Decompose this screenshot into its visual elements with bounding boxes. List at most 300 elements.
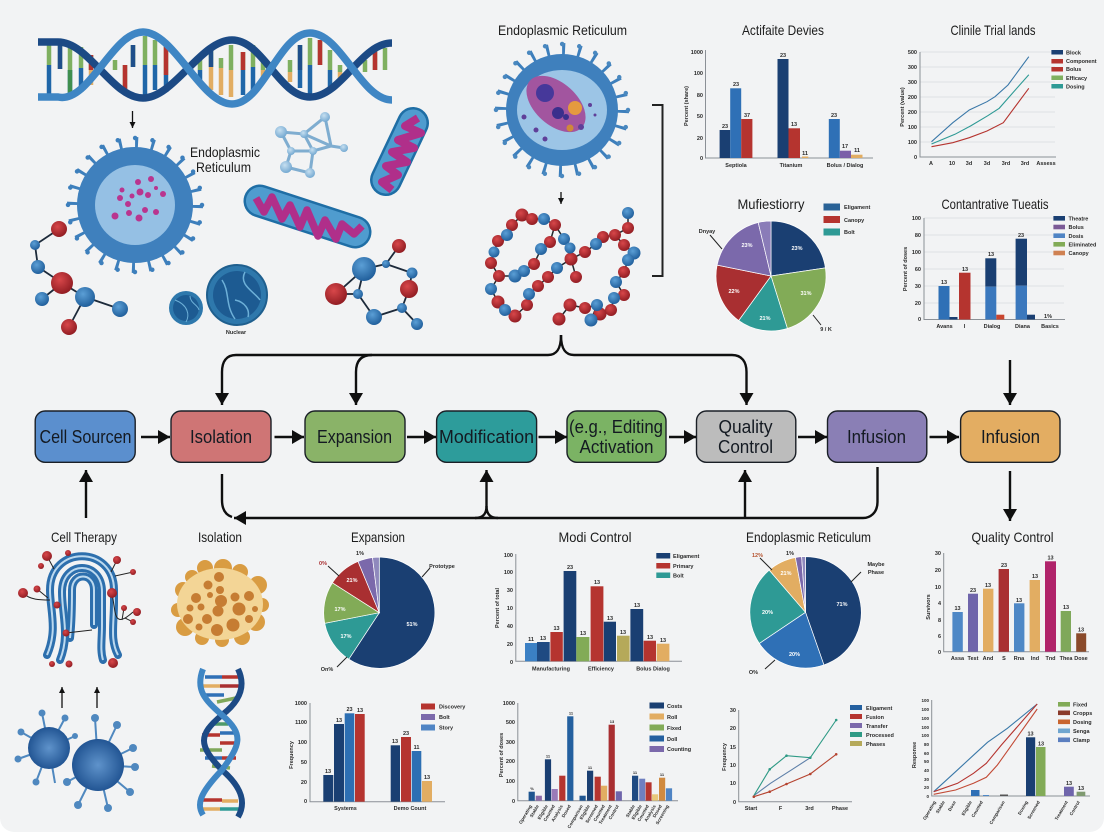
chart: mixed line and bars lower right: Dose	[947, 800, 957, 812]
chart: mixed line and bars lower right: 100	[921, 707, 929, 712]
chart: Modi Control grouped bars: 13	[580, 631, 586, 637]
chart: Actifaite Devies bar chart	[684, 22, 873, 169]
chart: Quality Control bars: 30	[935, 551, 941, 557]
chart: Contantrative Tueatis stacked bars: Diana	[1015, 324, 1031, 330]
chart: Actifaite Devies bar chart: 37	[744, 113, 750, 119]
step: Infusion: Infusion	[847, 427, 906, 447]
chart: Endoplasmic Reticulum pie: 1%	[786, 551, 794, 557]
illustration: vertical DNA	[200, 669, 242, 817]
chart: Quality Control bars: 23	[970, 588, 976, 594]
chart: multi-group bars lower middle: Screened	[584, 804, 599, 824]
arrow: up to Cell Sourcen	[85, 470, 87, 518]
chart: Mufiestiorry pie chart: 22%	[728, 289, 740, 295]
chart: Actifaite Devies bar chart: Bolus / Dialog	[827, 163, 863, 169]
chart: mixed line and bars lower right: Counted	[970, 800, 984, 818]
step: Expansion	[305, 411, 405, 462]
chart: Modi Control grouped bars	[495, 553, 699, 672]
chart: grouped bars lower left: 13	[336, 718, 342, 724]
chart: multi-group bars lower middle: Treatment	[598, 804, 613, 825]
chart: mixed line and bars lower right: Comparison	[988, 800, 1006, 825]
chart: grouped bars lower left: 13	[325, 769, 331, 775]
chart: mixed line and bars lower right: 100	[921, 716, 929, 721]
connector: top brace with arrows to Isolation, Expansion, Quality Control	[222, 335, 746, 405]
chart: Contantrative Tueatis stacked bars	[903, 196, 1096, 330]
chart: grouped bars lower left: 13	[424, 775, 430, 781]
chart: grouped bars lower left: Discovery	[439, 704, 466, 710]
chart: multi-group bars lower middle: Counted	[636, 804, 650, 822]
chart: Mufiestiorry pie chart: 23%	[791, 246, 803, 252]
chart: Modi Control grouped bars: 13	[620, 630, 626, 636]
chart: two-series line chart: 30	[730, 708, 736, 714]
title: Expansion: Expansion	[351, 529, 405, 545]
chart: mixed line and bars lower right: 13	[1038, 742, 1044, 748]
chart: multi-group bars lower middle: Control	[608, 804, 620, 820]
chart: multi-group bars lower middle: Analysis	[643, 804, 657, 823]
chart: Modi Control grouped bars: Eligament	[673, 554, 699, 560]
chart: Actifaite Devies bar chart: 23	[722, 124, 728, 130]
chart: Quality Control bars: 6	[938, 634, 941, 640]
chart: Clinile Trial lands line chart: 3d	[984, 161, 990, 167]
step: Modification: Modification	[439, 427, 534, 447]
chart: multi-group bars lower middle: Counting	[667, 747, 691, 753]
chart: multi-group bars lower middle: Counted	[542, 804, 556, 822]
chart: Modi Control grouped bars: Manufacturing	[532, 666, 570, 672]
chart: multi-group bars lower middle: Dosed	[561, 804, 572, 818]
chart: Clinile Trial lands line chart: Efficacy	[1066, 76, 1088, 82]
chart: Clinile Trial lands line chart: Assess	[1036, 161, 1056, 167]
chart: multi-group bars lower middle: %	[530, 786, 534, 791]
chart: Actifaite Devies bar chart: 50	[697, 114, 703, 120]
chart: Clinile Trial lands line chart	[900, 22, 1097, 167]
chart: Mufiestiorry pie chart: 9 / K	[820, 327, 832, 333]
chart: Quality Control bars	[926, 551, 1089, 662]
label: Endoplasmic Reticulum: Endoplasmic	[190, 144, 260, 160]
arrow: down to right Infusion	[1009, 360, 1011, 405]
chart: Modi Control grouped bars: 13	[647, 635, 653, 641]
chart: Clinile Trial lands line chart: Component	[1066, 59, 1097, 65]
chart: multi-group bars lower middle: Stable	[529, 804, 540, 818]
chart: Modi Control grouped bars: 13	[553, 626, 560, 632]
chart: Actifaite Devies bar chart: 11	[854, 148, 860, 154]
chart: two-series line chart: Phase	[832, 806, 848, 812]
chart: multi-group bars lower middle: 11	[569, 710, 574, 716]
chart: Actifaite Devies bar chart: 1000	[691, 50, 703, 56]
chart: Actifaite Devies bar chart: 23	[780, 53, 786, 59]
chart: multi-group bars lower middle: Eligible	[537, 804, 549, 820]
illustration: round organelles: Nuclear	[226, 330, 247, 336]
title: Quality Control: Quality Control	[972, 529, 1054, 545]
chart: multi-group bars lower middle: Costs	[667, 704, 682, 710]
chart: Contantrative Tueatis stacked bars: 100	[912, 250, 921, 256]
illustration: round organelles	[169, 265, 267, 336]
chart: Contantrative Tueatis stacked bars: Contantrative Tueatis	[942, 196, 1048, 212]
chart: Clinile Trial lands line chart: Percent (value)	[900, 87, 906, 127]
chart: multi-group bars lower middle: 0	[512, 799, 515, 805]
bracket: right of bead chain	[652, 105, 662, 276]
chart: Clinile Trial lands line chart: 300	[908, 65, 917, 71]
chart: multi-group bars lower middle: 11	[660, 772, 665, 777]
chart: Actifaite Devies bar chart: Actifaite Devies	[742, 22, 824, 38]
chart: Contantrative Tueatis stacked bars: Avans	[936, 324, 953, 330]
chart: two-series line chart: 3rd	[805, 806, 814, 812]
chart: Expansion pie: 51%	[406, 622, 418, 628]
chart: Quality Control bars: 13	[954, 606, 961, 612]
chart: Expansion pie: 17%	[340, 634, 352, 640]
illustration: DNA double helix	[38, 32, 392, 104]
chart: Clinile Trial lands line chart: Dosing	[1066, 84, 1085, 90]
chart: Modi Control grouped bars: Primary	[673, 564, 694, 570]
chart: multi-group bars lower middle: Analysis	[550, 804, 564, 823]
chart: Modi Control grouped bars: Percent of total	[495, 588, 501, 628]
chart: Modi Control grouped bars: Efficiency	[588, 666, 615, 672]
chart: multi-group bars lower middle: 200	[506, 759, 515, 765]
chart: Expansion pie: Prototype	[429, 564, 455, 570]
connector: return loop under flow	[222, 467, 878, 518]
chart: Quality Control bars: 13	[1063, 605, 1069, 611]
chart: Quality Control bars: Thea	[1060, 656, 1073, 662]
step: Infusion final: Infusion	[981, 427, 1040, 447]
chart: Endoplasmic Reticulum pie: 20%	[762, 610, 773, 616]
title: Endoplasmic Reticulum top: Endoplasmic Reticulum	[498, 22, 627, 38]
chart: Contantrative Tueatis stacked bars: I	[964, 324, 966, 330]
step: Editing Activation: Activation	[580, 437, 654, 457]
illustration: mitochondrion upright	[382, 118, 421, 190]
chart: multi-group bars lower middle: Fixed	[667, 726, 681, 732]
chart: Clinile Trial lands line chart: A	[929, 161, 933, 167]
chart: mixed line and bars lower right: Screened	[1026, 800, 1041, 820]
chart: mixed line and bars lower right: 0	[926, 794, 929, 799]
title: Isolation: Isolation	[198, 529, 242, 545]
chart: Contantrative Tueatis stacked bars: 0	[918, 317, 921, 323]
chart: Quality Control bars: 10	[935, 585, 941, 591]
chart: Modi Control grouped bars: 40	[507, 624, 513, 630]
chart: Contantrative Tueatis stacked bars: Theatre	[1068, 216, 1088, 222]
chart: Quality Control bars: Survivors	[926, 594, 932, 620]
illustration: isolated cell cluster	[171, 559, 269, 647]
chart: grouped bars lower left: Demo Count	[394, 806, 427, 812]
chart: Contantrative Tueatis stacked bars: 1%	[1044, 314, 1052, 320]
chart: multi-group bars lower middle: 13	[610, 719, 615, 724]
step: Cell Sourcen: Cell Sourcen	[40, 427, 132, 447]
chart: mixed line and bars lower right: Stable	[935, 800, 946, 814]
chart: Quality Control bars: 13	[1078, 628, 1084, 634]
chart: grouped bars lower left: Systems	[334, 806, 357, 812]
chart: Modi Control grouped bars: 100	[504, 570, 513, 576]
chart: Contantrative Tueatis stacked bars: Eliminated	[1068, 242, 1096, 248]
chart: Clinile Trial lands line chart: 3rd	[1021, 161, 1029, 167]
chart: Modi Control grouped bars: 20	[507, 642, 513, 648]
chart: grouped bars lower left: Frequency	[289, 740, 295, 769]
arrows: spiky cells upward	[62, 687, 97, 708]
chart: Actifaite Devies bar chart: 80	[697, 93, 703, 99]
chart: grouped bars lower left: 23	[346, 707, 353, 713]
chart: Clinile Trial lands line chart: Clinile Trial lands	[950, 22, 1036, 38]
chart: Contantrative Tueatis stacked bars: 80	[915, 233, 921, 239]
label: Endoplasmic Reticulum: Reticulum	[196, 159, 251, 175]
chart: Quality Control bars: 8	[938, 618, 941, 624]
chart: Mufiestiorry pie chart: Eligament	[844, 205, 870, 211]
chart: multi-group bars lower middle: Dosed	[652, 804, 663, 818]
chart: mixed line and bars lower right: Eligible	[961, 800, 973, 816]
chart: Mufiestiorry pie chart: 23%	[741, 243, 753, 249]
chart: Modi Control grouped bars: 13	[594, 580, 600, 586]
chart: mixed line and bars lower right: 13	[1027, 732, 1034, 738]
chart: Clinile Trial lands line chart: 200	[908, 110, 917, 116]
process flow	[35, 411, 1060, 462]
chart: Expansion pie: 1%	[356, 551, 364, 557]
arrow: cell to bead chain	[560, 192, 562, 204]
step: Infusion	[828, 411, 927, 462]
chart: Clinile Trial lands line chart: 100	[908, 140, 917, 146]
chart: Actifaite Devies bar chart: 100	[694, 71, 703, 77]
chart: mixed line and bars lower right: 30	[924, 777, 929, 782]
chart: mixed line and bars lower right: 13	[1078, 786, 1084, 792]
chart: Quality Control bars: 13	[1047, 556, 1054, 562]
chart: Clinile Trial lands line chart: 0	[914, 155, 917, 161]
chart: mixed line and bars lower right: Fixed	[1073, 702, 1087, 708]
chart: grouped bars lower left: 1100	[295, 720, 307, 726]
chart: multi-group bars lower middle: 100	[506, 779, 515, 785]
chart: multi-group bars lower middle: Roll	[667, 715, 678, 721]
chart: Actifaite Devies bar chart: Septiola	[725, 163, 748, 169]
chart: Quality Control bars: Tnd	[1045, 656, 1056, 662]
chart: two-series line chart: Transfer	[866, 724, 889, 730]
chart: mixed line and bars lower right: 13	[1066, 781, 1072, 787]
chart: two-series line chart	[722, 705, 894, 812]
chart: two-series line chart: Start	[745, 806, 757, 812]
illustration: molecule right	[325, 239, 423, 330]
chart: Quality Control bars: 20	[935, 568, 941, 574]
chart: Modi Control grouped bars: Bolt	[673, 574, 684, 580]
chart: Mufiestiorry pie chart: Dnyay	[699, 229, 716, 235]
step: Editing Activation: (e.g., Editing	[569, 417, 663, 437]
chart: multi-group bars lower middle: 500	[506, 720, 515, 726]
chart: Endoplasmic Reticulum pie: Maybe	[867, 562, 885, 568]
step: Editing Activation	[567, 411, 666, 462]
chart: Expansion pie: 21%	[346, 578, 358, 584]
chart: multi-group bars lower middle: Eligible	[579, 804, 591, 820]
chart: two-series line chart: Frequency	[722, 742, 728, 771]
chart: two-series line chart: 0	[733, 800, 736, 806]
chart: multi-group bars lower middle: 11	[546, 754, 551, 758]
chart: two-series line chart: Eligament	[866, 706, 892, 712]
title: Modi Control: Modi Control	[558, 529, 632, 545]
arrows: between steps	[141, 436, 959, 438]
chart: mixed line and bars lower right: 100	[921, 733, 929, 738]
chart: mixed line and bars lower right: 60	[924, 751, 929, 756]
chart: Actifaite Devies bar chart: 23	[831, 113, 837, 119]
chart: grouped bars lower left: 100	[298, 740, 307, 746]
chart: Clinile Trial lands line chart: 200	[908, 95, 917, 101]
chart: Contantrative Tueatis stacked bars: 20	[915, 301, 921, 307]
chart: two-series line chart: 15	[730, 745, 736, 751]
chart: Contantrative Tueatis stacked bars: Basics	[1041, 324, 1059, 330]
chart: mixed line and bars lower right: Clamp	[1073, 738, 1090, 744]
chart: Modi Control grouped bars: 100	[504, 553, 513, 559]
step: Isolation	[171, 411, 271, 462]
chart: Actifaite Devies bar chart: 20	[697, 136, 703, 142]
chart: Expansion pie: 0%	[319, 561, 327, 567]
chart: Contantrative Tueatis stacked bars: 23	[1018, 233, 1024, 239]
illustration: blue cell with nucleus	[68, 138, 202, 272]
chart: mixed line and bars lower right: 100	[921, 725, 929, 730]
arrow: DNA to cell	[132, 111, 134, 128]
chart: Actifaite Devies bar chart: 17	[842, 144, 848, 150]
chart: Expansion pie: 17%	[334, 607, 346, 613]
chart: two-series line chart: Phases	[866, 742, 885, 748]
chart: mixed line and bars lower right: Cropps	[1073, 711, 1092, 717]
chart: two-series line chart: 10	[730, 781, 736, 787]
illustration: crystal molecule	[275, 112, 348, 178]
chart: multi-group bars lower middle: 1000	[503, 701, 515, 707]
chart: Contantrative Tueatis stacked bars: 30	[915, 284, 921, 290]
chart: Contantrative Tueatis stacked bars: Bolus	[1068, 225, 1084, 231]
chart: Mufiestiorry pie chart: Mufiestiorry	[738, 196, 804, 212]
chart: Expansion pie: On%	[321, 667, 333, 673]
chart: grouped bars lower left: 1000	[295, 701, 307, 707]
chart: mixed line and bars lower right: Dosing	[1073, 720, 1092, 726]
chart: Actifaite Devies bar chart: 0	[700, 156, 703, 162]
chart: two-series line chart: 20	[730, 726, 736, 732]
chart: Mufiestiorry pie chart: 21%	[759, 316, 771, 322]
chart: Quality Control bars: 13	[1016, 598, 1022, 604]
chart: Clinile Trial lands line chart: Block	[1066, 50, 1082, 56]
chart: Modi Control grouped bars: Bolus Dialog	[636, 666, 670, 672]
chart: Contantrative Tueatis stacked bars: Dialog	[984, 324, 1000, 330]
chart: Modi Control grouped bars: 13	[660, 638, 666, 644]
chart: Expansion pie	[319, 551, 455, 673]
chart: grouped bars lower left: 0	[304, 799, 307, 805]
chart: two-series line chart: Fusion	[866, 715, 885, 721]
step: Modification	[437, 411, 537, 462]
step: Quality Control: Quality	[718, 417, 772, 437]
step: Isolation: Isolation	[190, 427, 252, 447]
chart: Quality Control bars: 0	[938, 650, 941, 656]
chart: Clinile Trial lands line chart: 3d	[966, 161, 972, 167]
chart: mixed line and bars lower right: Response	[912, 742, 918, 768]
chart: mixed line and bars lower right: Senga	[1073, 729, 1090, 735]
chart: Contantrative Tueatis stacked bars: Dosis	[1068, 234, 1083, 240]
chart: Clinile Trial lands line chart: 10	[949, 161, 955, 167]
illustration: spiky immune cells	[14, 710, 139, 812]
title: Cell Therapy: Cell Therapy	[51, 529, 117, 545]
chart: mixed line and bars lower right: Dosing	[1017, 800, 1029, 816]
chart: Contantrative Tueatis stacked bars: Canopy	[1068, 251, 1090, 257]
step: Quality Control	[696, 411, 796, 462]
step: Infusion final	[961, 411, 1060, 462]
chart: Endoplasmic Reticulum pie: 12%	[752, 553, 763, 559]
chart: multi-group bars lower middle	[499, 701, 691, 829]
chart: two-series line chart: Processed	[866, 733, 894, 739]
chart: Actifaite Devies bar chart: Percent (share)	[684, 86, 690, 126]
chart: Modi Control grouped bars: 13	[607, 616, 613, 622]
chart: multi-group bars lower middle: 11	[633, 770, 638, 775]
chart: Contantrative Tueatis stacked bars: 13	[941, 280, 947, 286]
chart: Quality Control bars: Ind	[1031, 656, 1039, 662]
chart: Contantrative Tueatis stacked bars: 60	[915, 267, 921, 273]
chart: Quality Control bars: S	[1002, 656, 1006, 662]
chart: Mufiestiorry pie chart: Bolt	[844, 230, 855, 236]
chart: mixed line and bars lower right	[912, 698, 1092, 825]
chart: Clinile Trial lands line chart: 500	[908, 50, 917, 56]
chart: multi-group bars lower middle: Percent of doses	[499, 733, 505, 777]
chart: Mufiestiorry pie chart	[699, 196, 870, 333]
chart: Modi Control grouped bars: 13	[634, 603, 640, 609]
chart: mixed line and bars lower right: Treatment	[1054, 800, 1069, 821]
chart: multi-group bars lower middle: Comparison	[566, 804, 584, 829]
chart: Mufiestiorry pie chart: 31%	[800, 291, 812, 297]
chart: Quality Control bars: Dose	[1074, 656, 1088, 662]
chart: Quality Control bars: And	[983, 656, 993, 662]
chart: Modi Control grouped bars: 11	[528, 637, 534, 643]
chart: mixed line and bars lower right: Control	[1069, 800, 1081, 816]
chart: Endoplasmic Reticulum pie: 71%	[836, 602, 848, 608]
chart: Endoplasmic Reticulum pie: 20%	[789, 652, 800, 658]
chart: mixed line and bars lower right: 20	[924, 785, 929, 790]
illustration: mitochondrion horizontal	[256, 197, 362, 239]
chart: Quality Control bars: 13	[1032, 574, 1038, 580]
chart: Mufiestiorry pie chart: Canopy	[844, 218, 865, 224]
chart: Modi Control grouped bars: 0	[510, 660, 513, 666]
chart: Clinile Trial lands line chart: 300	[908, 80, 917, 86]
chart: mixed line and bars lower right: 100	[921, 698, 929, 703]
illustration: eukaryotic cell	[496, 44, 628, 176]
chart: multi-group bars lower middle: 300	[506, 740, 515, 746]
chart: Contantrative Tueatis stacked bars: 13	[962, 267, 968, 273]
chart: Modi Control grouped bars: 30	[507, 588, 513, 594]
chart: multi-group bars lower middle: Doll	[667, 737, 678, 743]
chart: grouped bars lower left: Story	[439, 726, 454, 732]
chart: Endoplasmic Reticulum pie: Phase	[868, 570, 884, 576]
step: Cell Sourcen	[35, 411, 135, 462]
chart: grouped bars lower left: 13	[392, 739, 398, 745]
chart: grouped bars lower left: 20	[301, 780, 307, 786]
illustration: molecule left	[30, 221, 128, 335]
chart: Quality Control bars: 13	[985, 583, 991, 589]
chart: Actifaite Devies bar chart: 11	[802, 151, 808, 157]
chart: Endoplasmic Reticulum pie: 21%	[780, 571, 792, 577]
chart: Contantrative Tueatis stacked bars: 13	[988, 252, 994, 258]
chart: mixed line and bars lower right: 80	[924, 742, 929, 747]
chart: Modi Control grouped bars: 10	[507, 606, 513, 612]
chart: mixed line and bars lower right: 50	[924, 759, 929, 764]
chart: multi-group bars lower middle: Counted	[592, 804, 606, 822]
chart: Actifaite Devies bar chart: 23	[733, 82, 739, 88]
chart: Quality Control bars: 4	[938, 601, 942, 607]
chart: grouped bars lower left: 50	[301, 760, 307, 766]
chart: grouped bars lower left	[289, 701, 466, 812]
chart: multi-group bars lower middle: Stable	[625, 804, 636, 818]
chart: Quality Control bars: 23	[1001, 563, 1007, 569]
chart: Clinile Trial lands line chart: Bolus	[1066, 67, 1081, 73]
chart: mixed line and bars lower right: 40	[924, 768, 929, 773]
chart: two-series line chart: F	[779, 806, 783, 812]
chart: Contantrative Tueatis stacked bars: 100	[912, 216, 921, 222]
illustration: bead chain protein	[485, 207, 640, 326]
chart: grouped bars lower left: 23	[403, 731, 409, 737]
chart: Endoplasmic Reticulum pie	[749, 551, 885, 676]
chart: Modi Control grouped bars: 23	[567, 565, 573, 571]
chart: Contantrative Tueatis stacked bars: Percent of doses	[903, 247, 909, 291]
chart: grouped bars lower left: 11	[414, 745, 419, 751]
chart: Quality Control bars: Rna	[1014, 656, 1025, 662]
step: Expansion: Expansion	[317, 427, 392, 447]
chart: grouped bars lower left: Bolt	[439, 715, 450, 721]
illustration: endoplasmic reticulum folds	[18, 550, 141, 668]
chart: Actifaite Devies bar chart: Titanium	[780, 163, 803, 169]
label: Endoplasmic Reticulum	[190, 144, 260, 175]
chart: Clinile Trial lands line chart: 100	[908, 125, 917, 131]
